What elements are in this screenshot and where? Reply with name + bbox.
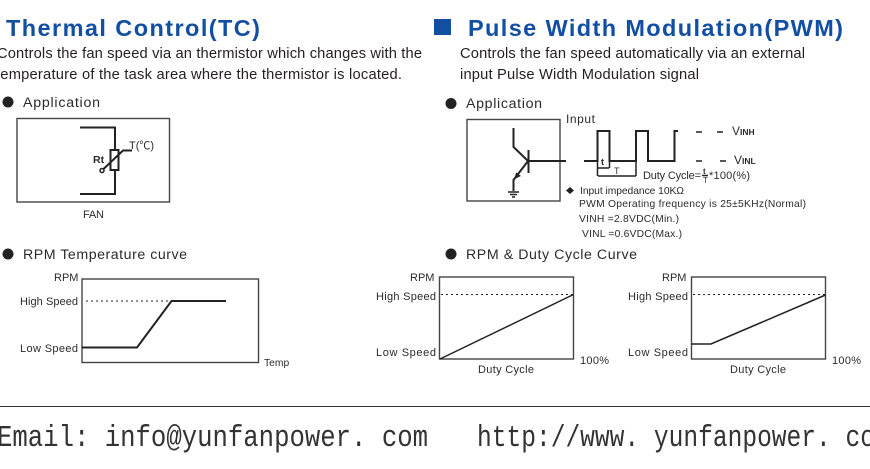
chart: RPM duty cycle with minimum speed: Low Speed — [628, 347, 688, 359]
chart: RPM temperature curve: Low Speed — [20, 343, 78, 355]
chart: RPM duty cycle linear: High Speed — [376, 291, 436, 303]
chart: RPM duty cycle with minimum speed: High Speed — [628, 291, 688, 303]
diagram: PWM input waveform: t — [601, 157, 604, 167]
chart: RPM duty cycle linear: Low Speed — [376, 347, 436, 359]
diagram: PWM input waveform: VINL — [734, 153, 756, 167]
chart: RPM duty cycle linear: RPM — [410, 272, 434, 284]
footer: contact details — [0, 406, 870, 456]
text block: PWM description — [460, 46, 805, 83]
subheading: application: Application — [23, 95, 100, 111]
diagram: PWM input waveform: T — [614, 166, 620, 176]
diagram: PWM input waveform: *100(%) — [709, 170, 750, 182]
chart: RPM duty cycle with minimum speed — [628, 272, 861, 376]
chart: RPM temperature curve: High Speed — [20, 296, 78, 308]
diagram: PWM input waveform: t — [703, 167, 706, 176]
chart: RPM duty cycle linear: Duty Cycle — [478, 364, 534, 376]
chart: RPM duty cycle with minimum speed: 100% — [832, 355, 861, 367]
diagram: PWM input waveform: VINH — [732, 124, 755, 138]
diagram: thermistor circuit: Rt — [93, 154, 105, 166]
diagram: PWM input waveform — [566, 112, 756, 185]
chart: RPM duty cycle linear — [376, 272, 609, 376]
text block: thermal control description: Controls the fan speed via an thermistor which changes with the — [0, 46, 422, 62]
diagram: thermistor circuit: T(℃) — [129, 140, 154, 152]
subheading: RPM and duty cycle curve: RPM & Duty Cycle Curve — [466, 247, 637, 263]
icon: blue square — [434, 19, 451, 35]
text block: input specifications: PWM Operating frequency is 25±5KHz(Normal) — [579, 199, 806, 210]
text block: thermal control description — [0, 46, 422, 83]
diagram: PWM input waveform: Duty Cycle= — [643, 170, 701, 182]
text block: input specifications: VINL =0.6VDC(Max.) — [582, 229, 682, 240]
chart: RPM temperature curve: Temp — [264, 358, 289, 369]
text block: input specifications: Input impedance 10KΩ — [580, 186, 684, 197]
text block: input specifications — [566, 186, 806, 240]
text: email address: Email: info@yunfanpower. com — [0, 421, 428, 456]
diagram: thermistor circuit: FAN — [83, 209, 104, 221]
diagram: transistor circuit — [467, 120, 566, 201]
diagram: PWM input waveform: T — [703, 176, 708, 185]
subheading: RPM temperature curve: RPM Temperature curve — [23, 247, 187, 263]
text block: input specifications: VINH =2.8VDC(Min.) — [579, 214, 679, 225]
chart: RPM temperature curve: RPM — [54, 272, 78, 284]
heading: pulse width modulation: Pulse Width Modulation(PWM) — [468, 15, 843, 41]
heading: thermal control: Thermal Control(TC) — [6, 15, 260, 41]
diagram: thermistor circuit — [17, 118, 170, 221]
text block: PWM description: Controls the fan speed automatically via an external — [460, 46, 805, 62]
panel: thermal control — [0, 15, 422, 369]
chart: RPM duty cycle linear: 100% — [580, 355, 609, 367]
subheading: application: Application — [466, 96, 542, 112]
chart: RPM temperature curve — [20, 272, 289, 369]
text block: thermal control description: temperature of the task area where the thermistor is located. — [0, 67, 402, 83]
diagram: PWM input waveform: Input — [566, 112, 596, 126]
text block: PWM description: input Pulse Width Modulation signal — [460, 67, 699, 83]
chart: RPM duty cycle with minimum speed: Duty Cycle — [730, 364, 786, 376]
chart: RPM duty cycle with minimum speed: RPM — [662, 272, 686, 284]
panel: pulse width modulation — [376, 15, 861, 376]
